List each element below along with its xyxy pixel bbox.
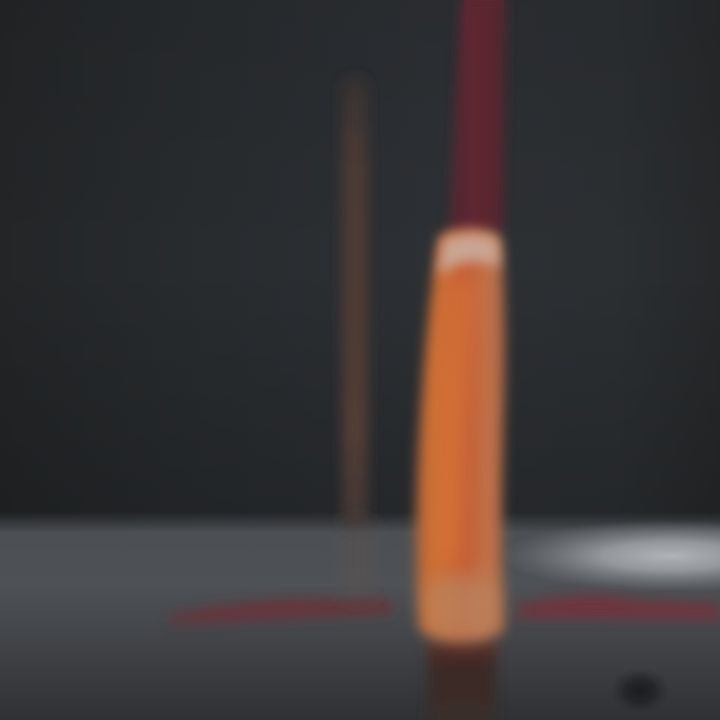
pale lower part of the orange rod bbox=[426, 575, 498, 640]
orange rod bbox=[416, 228, 505, 640]
pale cap of the orange rod bbox=[438, 233, 500, 276]
dark red upper rod bbox=[448, 0, 508, 232]
dark base of the rod bbox=[428, 640, 496, 720]
bright streak on the orange rod bbox=[442, 280, 472, 560]
grey floor surface bbox=[0, 512, 720, 720]
red horizontal line on the floor bbox=[170, 595, 720, 624]
thin brown rod bbox=[342, 78, 368, 528]
faint rod reflection on floor bbox=[342, 525, 372, 595]
